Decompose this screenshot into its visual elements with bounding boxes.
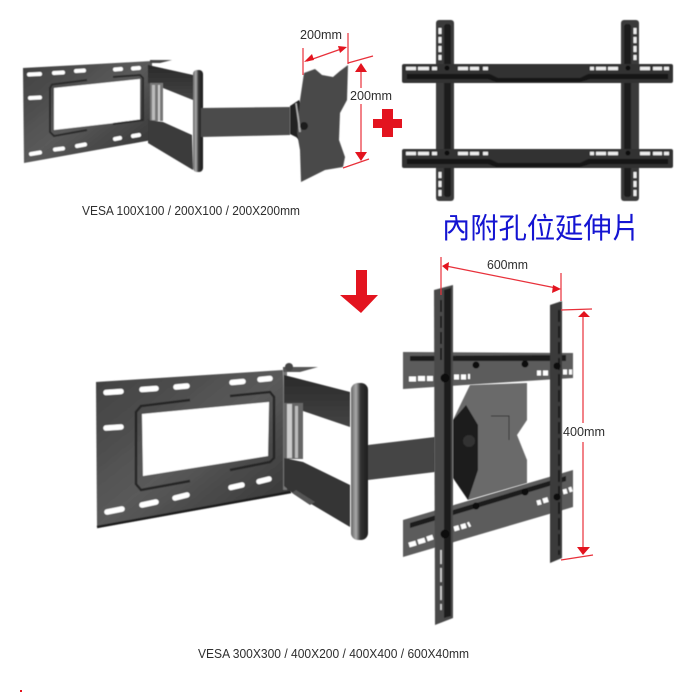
large mount with 600mm rails [96,257,605,625]
swing arm: small mount [148,60,290,172]
speck: bottom-left red mark [20,690,22,692]
dimension: 200mm width: 200mm [300,27,342,42]
tilt head: small mount [290,100,305,145]
wall plate: large mount [96,370,291,527]
vertical rail: large mount right [550,301,562,563]
horizontal bar: large mount lower [403,470,573,557]
horizontal bar: large mount upper [403,352,573,389]
vertical rail left [436,20,454,201]
VESA plate: small mount [296,65,348,182]
dimension: 400mm: 400mm [563,424,605,439]
icon: red down arrow [340,270,378,313]
caption: small VESA sizes: VESA 100X100 / 200X100 / 200X200mm [82,204,300,218]
vertical rail: large mount left [434,285,453,625]
caption: included extension plates: 內附孔位延伸片 [442,212,640,244]
dimension: 200mm width [300,27,348,75]
extension plates [402,20,673,201]
small mount with 200mm bracket [23,27,392,182]
dimension: 400mm [561,309,605,560]
vertical rail right [621,20,639,201]
caption: large VESA sizes: VESA 300X300 / 400X200 / 400X400 / 600X40mm [198,647,469,661]
horizontal bar upper [402,64,673,83]
dimension: 200mm height: 200mm [350,88,392,103]
horizontal bar lower [402,149,673,168]
icon: red plus [373,109,402,137]
dimension: 200mm height [343,56,392,168]
dimension: 600mm: 600mm [487,257,528,272]
wall plate: small mount [23,61,152,163]
swing arm: large mount [283,363,435,540]
tilt head and VESA plate: large mount [453,383,527,500]
dimension: 600mm [441,257,561,301]
